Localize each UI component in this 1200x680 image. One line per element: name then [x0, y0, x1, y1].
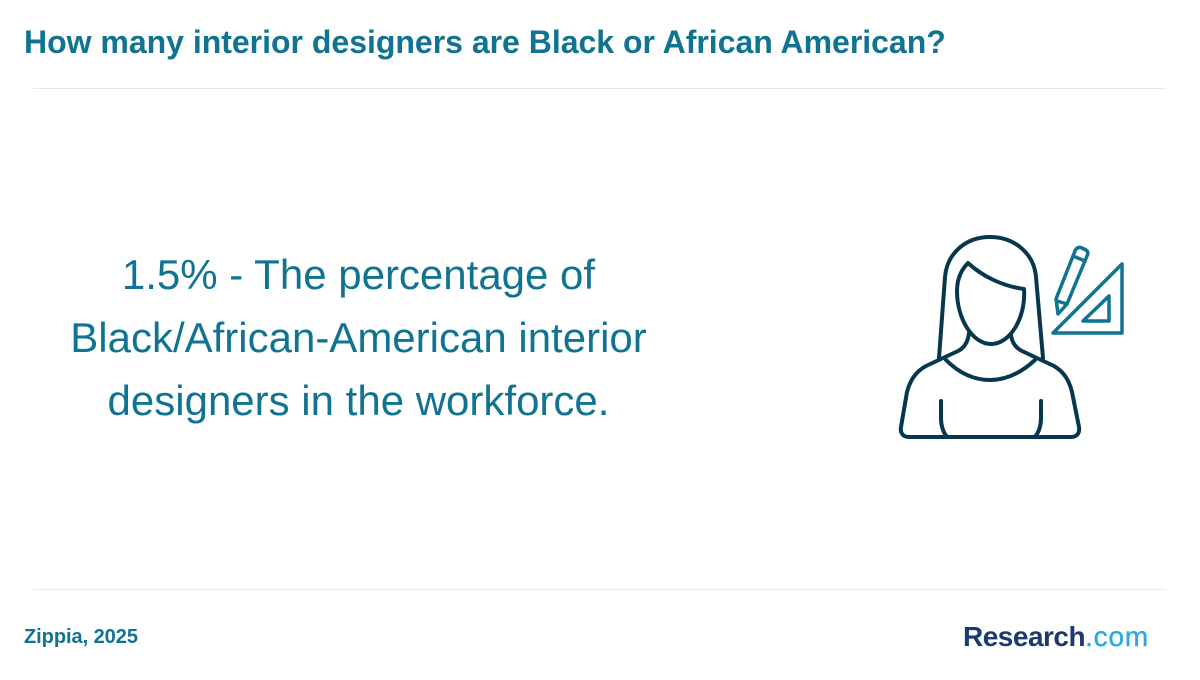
logo: Research.com: Research.com — [963, 621, 1149, 652]
main statistic text — [70, 251, 647, 424]
icon: woman designer with pencil and set square — [898, 235, 1124, 440]
icon: pencil — [1056, 247, 1088, 314]
source note: Zippia, 2025 — [24, 626, 138, 648]
main statistic text: Black/African-American interior — [70, 314, 647, 361]
title: How many interior designers are Black or African American? — [24, 24, 946, 60]
main statistic text: designers in the workforce. — [108, 377, 609, 424]
icon: set square — [1053, 264, 1122, 333]
main statistic text: 1.5% - The percentage of — [122, 251, 595, 298]
icon: woman figure — [901, 237, 1079, 437]
